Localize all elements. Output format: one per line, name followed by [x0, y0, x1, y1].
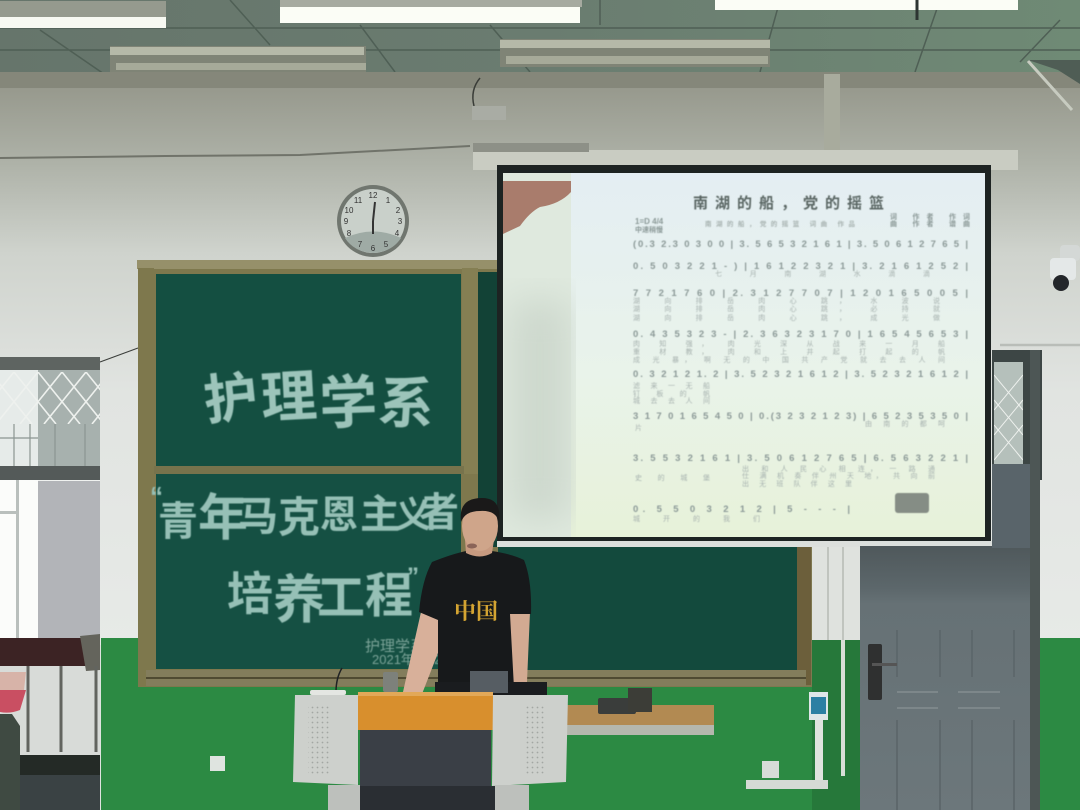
chalk title: project name [150, 481, 459, 630]
score sheet notation: 0. 4 3 5 3 2 3 - | 2. 3 6 3 2 3 1 7 0 | 1 6 5 4 5 6 5 3 | [633, 329, 968, 340]
chalk signature and date [365, 638, 441, 667]
chalk heading: department name: 学 [318, 370, 378, 437]
hair [461, 498, 499, 522]
wall clock: 5 [384, 240, 389, 249]
QR code [895, 493, 929, 513]
projection screen [497, 165, 1003, 547]
score sheet lyrics: 史 的 城 堡 [635, 473, 710, 482]
score sheet lyrics: 钉 板 的 帆 [633, 389, 710, 398]
wall clock: 7 [358, 240, 363, 249]
chalk heading: department name: 系 [376, 370, 436, 437]
chalk title: project name: 义 [395, 494, 431, 535]
wall clock: 1 [386, 196, 391, 205]
chalk heading: department name: 理 [259, 364, 319, 430]
neck [465, 540, 494, 556]
classroom door [860, 350, 1042, 810]
wall clock: 12 [369, 191, 378, 200]
wall clock: 3 [398, 217, 403, 226]
score sheet lyrics: 七 月 南 湖 水 滴 滴 [715, 269, 930, 278]
chalk title: project name: 马 [238, 495, 278, 539]
chalk title: project name: 养 [273, 572, 325, 630]
chalk title: project name: 主 [360, 493, 400, 537]
score sheet lyrics: 出 和 人 民 心 相 连， 一 路 通 [742, 464, 935, 473]
score sheet notation: 词 作者 作词 [890, 212, 970, 222]
screen casing [473, 143, 1018, 170]
ceiling with lights [0, 0, 1080, 110]
shirt text: 中国 [454, 595, 498, 626]
score sheet lyrics [633, 269, 945, 523]
score sheet notation: 南湖的船，党的摇篮 词曲 作品 [705, 218, 856, 228]
score sheet lyrics: 成 光 暴， 啊 无 的 中 国 共 产 党 就 去 去 人 间 [633, 355, 945, 364]
score sheet notation: 0. 3 2 1 2 1. 2 | 3. 5 2 3 2 1 6 1 2 | 3. 5 2 3 2 1 6 1 2 | [633, 369, 968, 380]
chalk title: project name: 青 [158, 500, 198, 544]
head [462, 501, 498, 551]
arms [403, 612, 450, 694]
wall sockets and switch box [210, 692, 828, 789]
wall clock: 2 [396, 206, 401, 215]
chalkboard frame [137, 260, 806, 687]
score sheet lyrics: 出 无 班 队 伴 这 里 [742, 479, 852, 488]
wall clock [337, 185, 409, 257]
chalk title: project name: 者 [419, 491, 459, 535]
speaker [403, 498, 531, 694]
chalk signature and date: 护理学系团 [365, 638, 440, 655]
CCTV camera [1050, 245, 1080, 291]
chalk title: project name: 年 [198, 490, 248, 546]
chalk heading: department name [201, 364, 436, 437]
score sheet lyrics: 湖 向 排 岳 肉 心 跳， 必 持 就 [633, 304, 940, 313]
wall clock: 8 [347, 229, 352, 238]
wall [0, 85, 1080, 645]
window on left [0, 357, 100, 810]
black t-shirt [419, 551, 531, 688]
score sheet notation: 曲 作者 谱曲 [890, 219, 970, 229]
score sheet notation: 7 7 2 1 7 6 0 | 2. 3 1 2 7 7 0 7 | 1 2 0 1 6 5 0 0 5 | [633, 288, 968, 299]
score sheet notation: 1=D 4/4 [635, 217, 664, 226]
score sheet notation: 3. 5 5 3 2 1 6 1 | 3. 5 0 6 1 2 7 6 5 | 6. 5 6 3 2 2 1 | [633, 453, 968, 464]
score sheet notation: 0. 5 5 0 3 2 1 2 | 5 - - - | [633, 504, 850, 515]
chalk title: project name: “ [150, 481, 163, 511]
green lower wall [101, 546, 1080, 810]
score sheet lyrics: 片 [635, 423, 642, 432]
score sheet lyrics: 由 南 的 都 呵 [865, 419, 945, 428]
chalk heading: department name: 护 [201, 367, 261, 432]
score sheet lyrics: 城 开 的 我 们 [633, 514, 760, 523]
score sheet lyrics: 仕 满 机 奏 伴 州 天 地， 共 向 前 [742, 471, 935, 480]
score sheet title: 南湖的船，党的摇篮 [693, 194, 884, 212]
chalk signature and date: 2021年5月2 [372, 652, 441, 667]
chalk title: project name: 恩 [320, 495, 358, 537]
score sheet lyrics: 城 去 去 人 间 [633, 396, 710, 405]
score sheet notation [633, 212, 970, 515]
score sheet lyrics: 滤 来 一 无 船 [633, 381, 710, 390]
score sheet notation: 0. 5 0 3 2 2 1 - ) | 1 6 1 2 2 3 2 1 | 3. 2 1 6 1 2 5 2 | [633, 261, 968, 272]
wall clock: 11 [354, 196, 363, 205]
score sheet notation: (0.3 2.3 0 3 0 0 | 3. 5 6 5 3 2 1 6 1 | 3. 5 0 6 1 2 7 6 5 | [633, 239, 968, 250]
chalk title: project name: 克 [278, 494, 320, 541]
score sheet notation: 3 1 7 0 1 6 5 4 5 0 | 0.(3 2 3 2 1 2 3) | 6 5 2 3 5 3 5 0 | [633, 411, 968, 422]
lectern [293, 668, 568, 810]
side desk [566, 688, 714, 735]
score sheet lyrics: 肉 知 强， 肉 光 深 从 战 来 一 月 船 [633, 339, 945, 348]
score sheet lyrics: 重 材 教， 肉 和 上 井 起 打 起 的 帆 [633, 347, 945, 356]
chalk title: project name: 工 [317, 572, 365, 625]
score sheet notation: 中速稍慢 [635, 225, 663, 235]
chalkboard lower right panel [480, 545, 812, 687]
wall pipes and fittings [0, 74, 1080, 362]
wall clock: 4 [395, 229, 400, 238]
chalk title: project name: ” [407, 563, 419, 590]
wall clock: 6 [371, 244, 376, 253]
score sheet lyrics: 湖 向 排 岳 肉 心 跳， 成 光 做 [633, 313, 940, 322]
score sheet lyrics: 湖 向 排 岳 肉 心 跳， 水 波 说 [633, 296, 940, 305]
chalk title: project name: 程 [365, 570, 413, 623]
chalk title: project name: 培 [227, 568, 273, 620]
wall clock: 9 [344, 217, 349, 226]
wall clock: 10 [345, 206, 354, 215]
